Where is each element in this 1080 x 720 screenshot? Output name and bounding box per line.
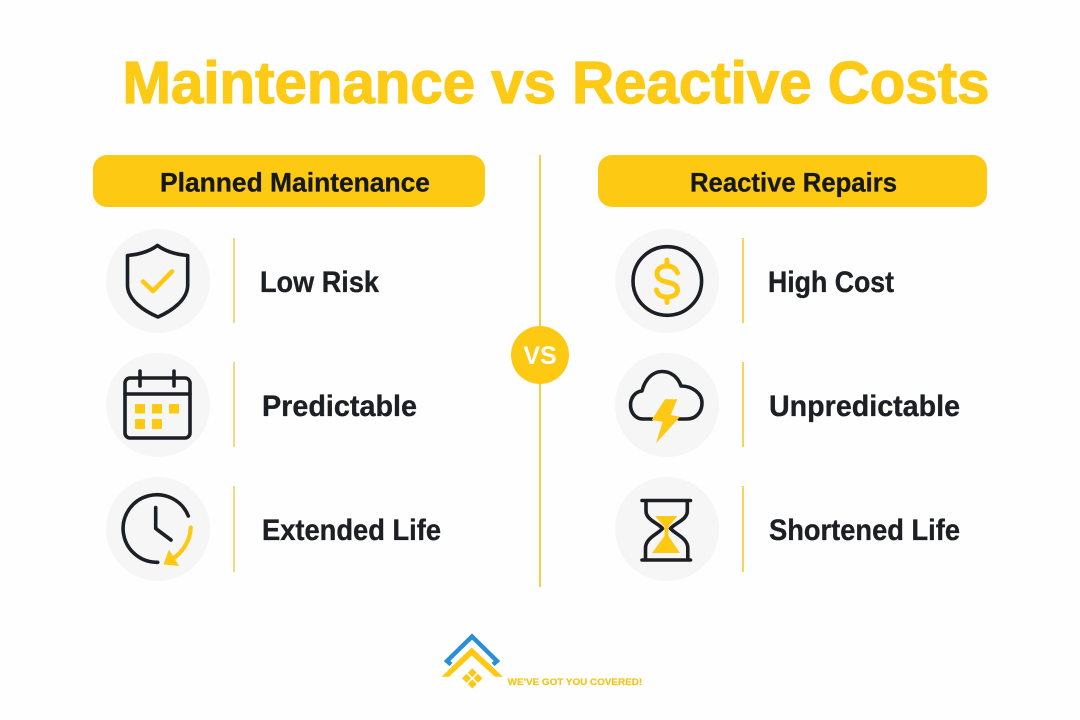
heading: reactive repairs — [598, 155, 987, 207]
label: predictable: Predictable — [262, 390, 417, 423]
icon: dollar coin — [633, 247, 702, 315]
row: extended life — [106, 477, 441, 581]
title: Maintenance vs Reactive Costs — [122, 49, 990, 116]
label: high cost: High Cost — [768, 266, 894, 299]
row: shortened life — [615, 477, 960, 581]
tagline: WE'VE GOT YOU COVERED! — [508, 677, 642, 688]
icon: clock with arrow — [123, 495, 191, 566]
icon: house roof logo — [442, 636, 503, 688]
center divider with VS badge: VS — [523, 342, 557, 370]
center divider with VS badge — [511, 155, 569, 587]
panel: planned maintenance — [93, 155, 485, 581]
icon: shield with check — [128, 246, 188, 317]
label: extended life: Extended Life — [262, 514, 441, 547]
row: high cost — [615, 229, 894, 333]
row: predictable — [106, 353, 417, 457]
label: shortened life: Shortened Life — [769, 514, 960, 547]
heading: planned maintenance — [93, 155, 485, 207]
heading: planned maintenance: Planned Maintenance — [160, 168, 430, 198]
heading: reactive repairs: Reactive Repairs — [690, 168, 897, 198]
row: unpredictable — [615, 353, 960, 457]
row: low risk — [106, 229, 379, 333]
panel: reactive repairs — [598, 155, 987, 581]
icon: hourglass — [642, 500, 690, 560]
label: unpredictable: Unpredictable — [769, 390, 960, 423]
logo and tagline — [442, 636, 642, 688]
icon: storm cloud with lightning — [630, 372, 702, 443]
icon: calendar — [125, 371, 190, 438]
label: low risk: Low Risk — [260, 266, 379, 299]
